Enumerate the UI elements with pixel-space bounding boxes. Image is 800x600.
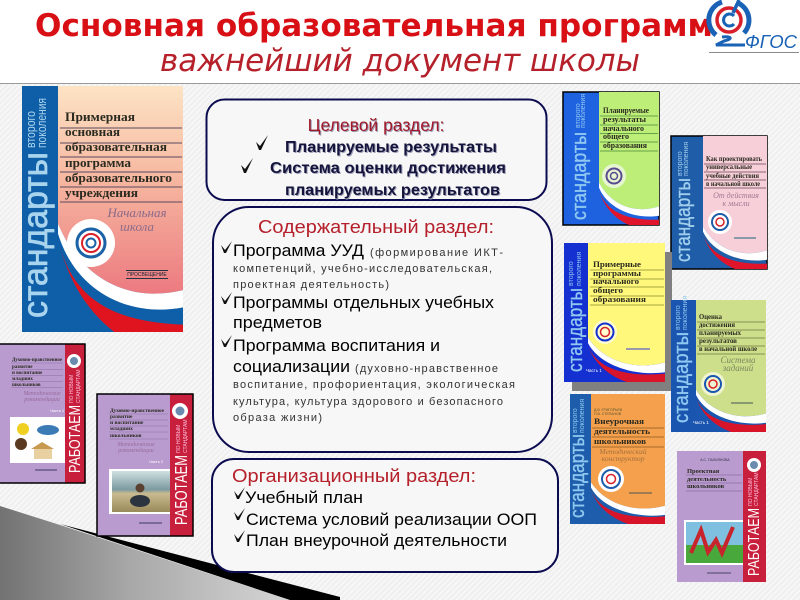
book: main educational programme: [16, 86, 183, 332]
book: spiritual and moral development, part 2: ПО НОВЫМ: [176, 425, 182, 453]
book: spiritual and moral development, part 2: школьников: [110, 433, 141, 439]
book: assessment of achievement: Оценка: [699, 313, 722, 321]
book: assessment of achievement: достижения: [699, 321, 735, 329]
list: content section: предметов: [233, 314, 322, 332]
book: main educational programme: стандарты: [16, 152, 55, 318]
corner wedge: [0, 506, 340, 600]
list: content section: воспитание, профориентация, экологическая: [233, 379, 515, 391]
book: spiritual and moral development, part 1: развитие: [12, 365, 33, 370]
list: content section: (формирование ИКТ-: [370, 247, 503, 259]
list: content section: культура, культура здорового и безопасного: [233, 396, 503, 408]
book: spiritual and moral development, part 2: развитие: [110, 414, 133, 420]
list: organisational section: Система условий реализации ООП: [246, 511, 537, 529]
book: main educational programme: основная: [65, 124, 120, 139]
book: assessment of achievement: второго: [675, 305, 682, 330]
book: extracurricular activity: Д.В. ГРИГОРЬЕВ: [594, 408, 623, 412]
list: content section: образа жизни): [233, 412, 322, 424]
title: [35, 8, 713, 79]
heading: organisational section: Организационный раздел:: [232, 466, 476, 486]
book: spiritual and moral development, part 2: младших: [110, 426, 133, 432]
book: main educational programme: Начальная: [106, 205, 166, 220]
book: project activity: [677, 451, 766, 582]
book: universal learning actions: поколения: [683, 142, 690, 176]
book: spiritual and moral development, part 2: РАБОТАЕМ: [171, 455, 191, 525]
title: Основная образовательная программ: [35, 8, 713, 44]
book: spiritual and moral development, part 2: Методические: [116, 441, 155, 448]
book: planned results: [563, 92, 659, 225]
list: organisational section: [245, 489, 537, 550]
icon: FGOS logo: [709, 0, 799, 53]
list: content section: социализации: [233, 358, 350, 376]
book: sample programmes: Примерные: [593, 260, 641, 269]
book: sample programmes: общего: [593, 286, 623, 295]
book: main educational programme: поколения: [35, 98, 49, 148]
book: extracurricular activity: конструктор: [602, 454, 645, 463]
icon: check marks: [241, 135, 268, 173]
book: planned results: образования: [603, 140, 647, 150]
book: universal learning actions: стандарты: [673, 178, 695, 262]
book: main educational programme: образовательного: [65, 170, 172, 185]
book: main educational programme: программа: [65, 155, 131, 170]
icon: check marks: [234, 487, 245, 542]
book: sample programmes: Часть 1: [586, 368, 602, 373]
book: extracurricular activity: [567, 394, 665, 524]
book: spiritual and moral development, part 1: Часть 1: [50, 408, 65, 413]
book: main educational programme: Примерная: [65, 109, 135, 124]
list: organisational section: План внеурочной деятельности: [246, 532, 507, 550]
book: planned results: второго: [575, 103, 582, 128]
list: content section: Программы отдельных учебных: [233, 294, 495, 312]
heading: content section: Содержательный раздел:: [258, 217, 494, 237]
list: content section: компетенций, учебно-исследовательская,: [233, 263, 492, 275]
book: main educational programme: второго: [24, 111, 38, 148]
book: spiritual and moral development, part 1: СТАНДАРТАМ: [76, 370, 82, 403]
book: project activity: Проектная: [687, 468, 720, 475]
book: universal learning actions: [671, 136, 767, 269]
book: spiritual and moral development, part 1: рекомендации: [23, 396, 60, 403]
list: content section: Программа воспитания и: [233, 337, 440, 355]
book: project activity: школьников: [687, 483, 725, 490]
book: assessment of achievement: Система: [720, 355, 756, 365]
book: sample programmes: начального: [593, 277, 639, 286]
book: universal learning actions: учебные действия: [706, 172, 759, 180]
book: main educational programme: образовательная: [65, 139, 167, 154]
book: planned results: стандарты: [569, 132, 591, 220]
title: важнейший документ школы: [160, 43, 640, 79]
book: main educational programme: ПРОСВЕЩЕНИЕ: [127, 272, 167, 278]
book: universal learning actions: От действия: [713, 191, 759, 200]
book: extracurricular activity: Внеурочная: [594, 416, 644, 426]
list: content section: проектная деятельность): [233, 279, 389, 291]
book: sample programmes: образования: [593, 295, 647, 304]
book: spiritual and moral development, part 1: [0, 344, 85, 483]
list: target section: планируемых результатов: [285, 182, 500, 199]
book: assessment of achievement: результатов: [699, 337, 737, 345]
book: spiritual and moral development, part 1: и воспитание: [12, 371, 43, 376]
book: universal learning actions: к мысли: [722, 199, 750, 208]
book: assessment of achievement: стандарты: [671, 332, 693, 423]
book: planned results: результаты: [603, 114, 646, 124]
book: assessment of achievement: Часть 1: [693, 420, 709, 425]
book: sample programmes: [564, 243, 672, 391]
book: assessment of achievement: поколения: [682, 296, 689, 330]
panel: organisational section: [212, 459, 558, 572]
book: planned results: общего: [603, 131, 629, 141]
book: sample programmes: второго: [568, 261, 575, 286]
heading: target section: Целевой раздел:: [308, 115, 444, 135]
book: sample programmes: стандарты: [565, 288, 587, 372]
book: extracurricular activity: поколения: [579, 399, 586, 433]
book: project activity: ПО НОВЫМ: [748, 478, 754, 506]
book: planned results: начального: [603, 123, 644, 133]
book: universal learning actions: в начальной школе: [706, 180, 760, 188]
book: universal learning actions: второго: [677, 151, 684, 176]
book: spiritual and moral development, part 2: СТАНДАРТАМ: [183, 420, 189, 453]
icon: check marks: [221, 241, 232, 347]
list: organisational section: Учебный план: [245, 489, 363, 507]
list: target section: Система оценки достижения: [270, 160, 506, 177]
book: extracurricular activity: П.В. СТЕПАНОВ: [594, 412, 622, 416]
book: assessment of achievement: заданий: [722, 363, 754, 373]
list: content section: Программа УУД: [233, 242, 364, 260]
book: sample programmes: программы: [593, 269, 642, 278]
book: spiritual and moral development, part 2: и воспитание: [110, 420, 144, 426]
book: spiritual and moral development, part 2: [97, 394, 193, 536]
book: project activity: СТАНДАРТАМ: [754, 472, 760, 506]
icon: FGOS logo: ФГОС: [745, 32, 798, 52]
book: universal learning actions: Как проектировать: [706, 155, 762, 163]
book: planned results: Планируемые: [603, 105, 649, 115]
book: universal learning actions: универсальные: [706, 163, 752, 171]
book: spiritual and moral development, part 1: ПО НОВЫМ: [69, 375, 75, 403]
list: target section: Планируемые результаты: [285, 139, 497, 156]
book: extracurricular activity: деятельность: [594, 426, 651, 436]
book: extracurricular activity: школьников: [594, 436, 646, 446]
list: content section: [233, 242, 515, 424]
book: spiritual and moral development, part 2: рекомендации: [117, 447, 154, 454]
book: spiritual and moral development, part 2: Часть 2: [149, 459, 164, 464]
book: planned results: поколения: [580, 94, 587, 128]
panel: target section: [206, 100, 546, 200]
book: assessment of achievement: планируемых: [699, 329, 741, 337]
book: spiritual and moral development, part 2: Духовно-нравственное: [110, 408, 165, 414]
book: main educational programme: школа: [120, 219, 154, 234]
book: spiritual and moral development, part 1: младших: [12, 377, 33, 382]
book: spiritual and moral development, part 1: школьников: [12, 383, 41, 388]
list: content section: (духовно-нравственное: [355, 363, 498, 375]
list: target section: [270, 139, 506, 199]
panel: content section: [213, 207, 552, 452]
book: sample programmes: поколения: [576, 252, 583, 286]
book: assessment of achievement: [671, 296, 766, 432]
book: assessment of achievement: в начальной школе: [699, 345, 757, 353]
book: spiritual and moral development, part 1: Духовно-нравственное: [12, 358, 63, 363]
book: spiritual and moral development, part 1: Методические: [22, 390, 61, 397]
book: extracurricular activity: стандарты: [567, 434, 589, 518]
book: main educational programme: учреждения: [65, 185, 138, 200]
book: project activity: А.С. ПАЛЬЯНОВА: [700, 458, 730, 462]
book: extracurricular activity: Методический: [598, 447, 647, 456]
book: project activity: деятельность: [687, 476, 727, 483]
book: spiritual and moral development, part 1: РАБОТАЕМ: [67, 405, 84, 473]
book: project activity: РАБОТАЕМ: [746, 508, 763, 576]
book: extracurricular activity: второго: [572, 408, 579, 433]
